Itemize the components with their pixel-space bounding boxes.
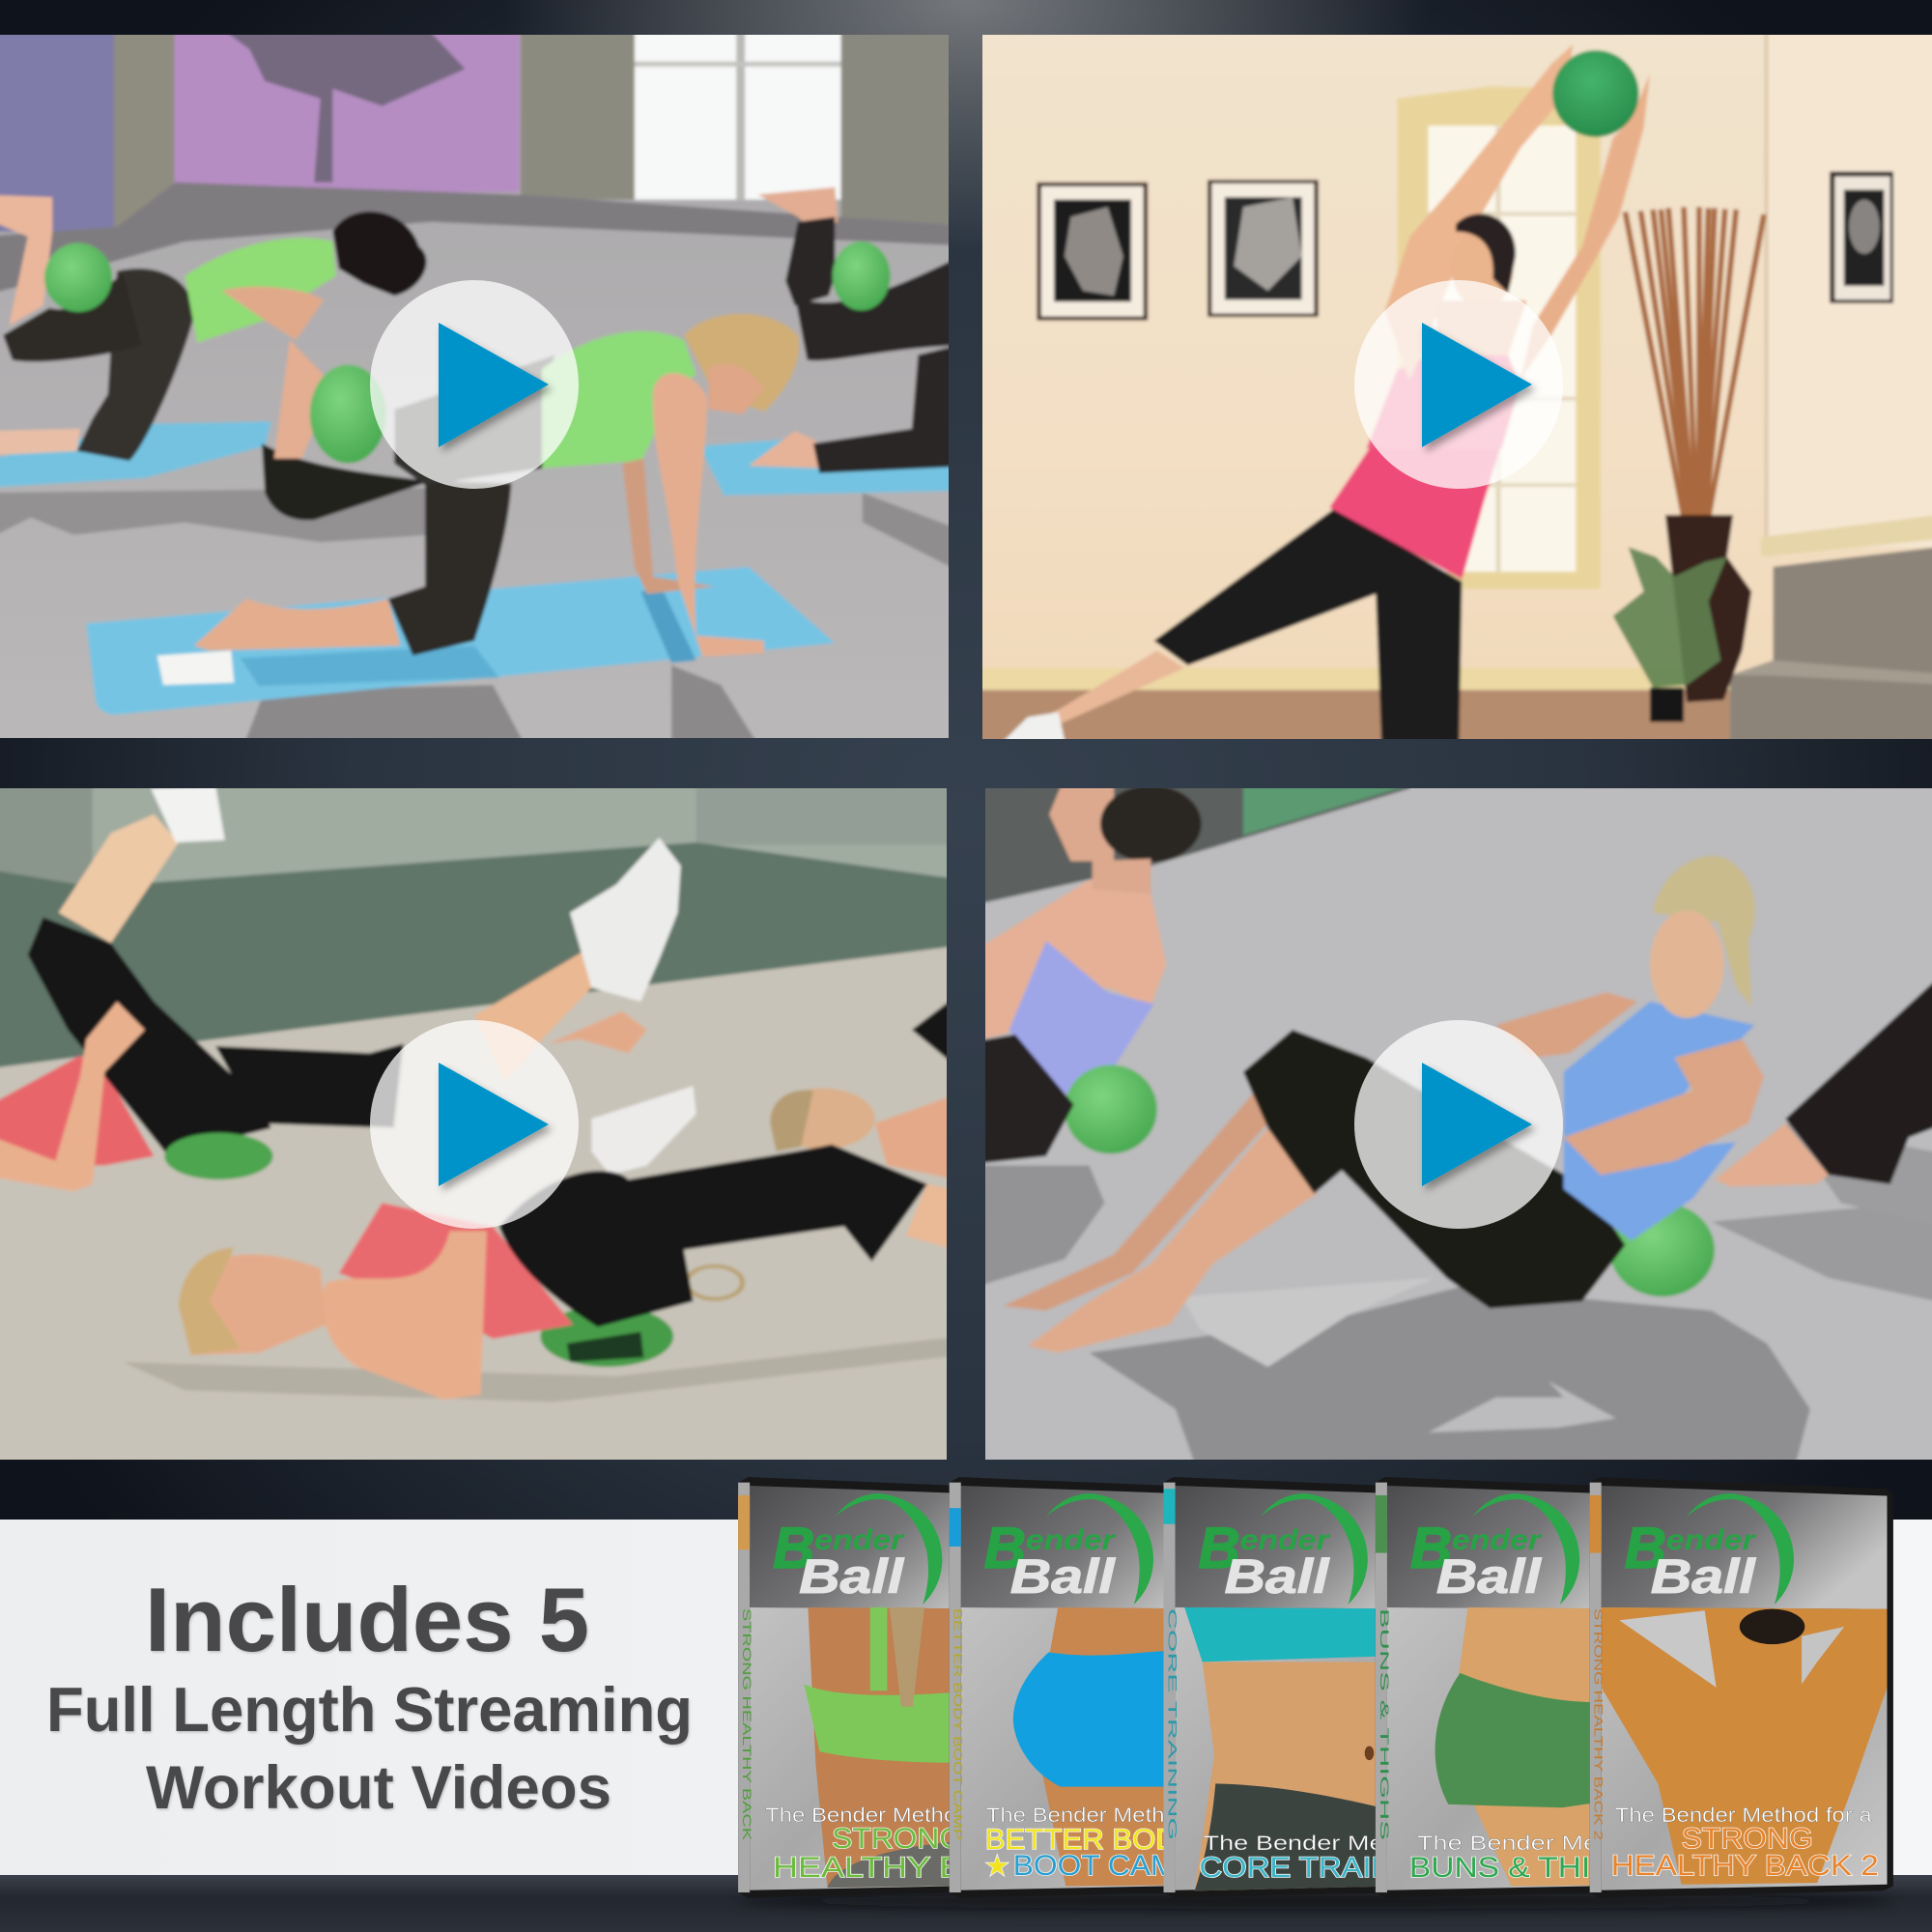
DVD case 4: Buns & Thighs: B	[1410, 1516, 1452, 1580]
DVD case 3: Core Training: B	[1198, 1516, 1240, 1580]
DVD case 1: Strong Healthy Back: ender	[814, 1524, 906, 1556]
DVD case 3: Core Training: ender	[1240, 1524, 1331, 1556]
DVD case 2: Better Body Boot Camp: BETTER BODY	[985, 1824, 1198, 1856]
DVD case 2: Better Body Boot Camp: Ball	[1010, 1549, 1116, 1604]
DVD case 5: Strong Healthy Back 2: B	[1625, 1516, 1666, 1580]
vase and plant	[1665, 515, 1751, 702]
caption heading: Includes 5	[145, 1569, 589, 1670]
play button	[1354, 280, 1563, 489]
DVD case 5: Strong Healthy Back 2: ender	[1666, 1524, 1757, 1556]
panel: video still, kneeling leg lifts	[0, 14, 980, 754]
panel: video still, seated twist	[960, 772, 1932, 1479]
DVD case 3: Core Training: CORE TRAINING	[1200, 1852, 1451, 1884]
DVD case 5: Strong Healthy Back 2: HEALTHY BACK 2	[1611, 1850, 1879, 1882]
back woman	[985, 879, 1167, 1040]
main woman	[1610, 1203, 1715, 1296]
window	[1397, 86, 1601, 589]
back right woman	[757, 187, 838, 232]
play button	[1354, 1020, 1563, 1229]
DVD case 5: Strong Healthy Back 2: STRONG	[1682, 1823, 1813, 1855]
DVD case 5: Strong Healthy Back 2	[1590, 1477, 1893, 1898]
DVD case 1: Strong Healthy Back: STRONG	[832, 1823, 963, 1855]
play button	[370, 280, 579, 489]
DVD case 1: Strong Healthy Back: B	[773, 1516, 814, 1580]
DVD case 1: Strong Healthy Back: HEALTHY BACK	[773, 1852, 1034, 1884]
panel: video still, floor bridge	[0, 772, 980, 1479]
DVD case 4: Buns & Thighs: BUNS & THIGHS	[1378, 1608, 1391, 1840]
DVD case 1: Strong Healthy Back	[738, 1477, 1041, 1898]
caption heading	[46, 1569, 693, 1822]
DVD case 2: Better Body Boot Camp: BETTER BODY BOOT CAMP	[952, 1608, 965, 1840]
DVD case 2: Better Body Boot Camp: B	[984, 1516, 1026, 1580]
DVD case 1: Strong Healthy Back: The Bender Method for a	[765, 1804, 1022, 1827]
back right woman	[800, 1087, 876, 1151]
DVD case 2: Better Body Boot Camp: The Bender Method for a	[986, 1804, 1243, 1827]
DVD case 2: Better Body Boot Camp: ★	[985, 1851, 1009, 1881]
DVD case 3: Core Training: CORE TRAINING	[1165, 1608, 1179, 1840]
DVD case 4: Buns & Thighs: ender	[1452, 1524, 1544, 1556]
caption heading: Full Length Streaming	[46, 1674, 693, 1745]
white caption band	[0, 1520, 1932, 1875]
DVD case 4: Buns & Thighs: Ball	[1436, 1549, 1542, 1604]
DVD case 3: Core Training: The Bender Method	[1204, 1833, 1435, 1855]
stairs	[1761, 513, 1932, 557]
left woman	[59, 814, 179, 943]
DVD case 5: Strong Healthy Back 2: The Bender Method for a	[1615, 1804, 1872, 1827]
picture frames	[1037, 183, 1148, 321]
dark base strip	[0, 1875, 1932, 1932]
floor shadows	[985, 1164, 1105, 1285]
DVD case 3: Core Training	[1163, 1477, 1467, 1898]
DVD case 4: Buns & Thighs: The Bender Method	[1417, 1833, 1649, 1855]
play button	[370, 1020, 579, 1229]
DVD case 1: Strong Healthy Back: STRONG HEALTHY BACK	[740, 1608, 753, 1840]
DVD case 2: Better Body Boot Camp: BOOT CAMP	[1013, 1850, 1197, 1882]
DVD case 5: Strong Healthy Back 2: Ball	[1651, 1549, 1756, 1604]
panel: video still, standing side stretch	[948, 14, 1932, 754]
reeds	[1625, 207, 1764, 518]
DVD case 1: Strong Healthy Back: Ball	[799, 1549, 904, 1604]
right woman	[1715, 1123, 1829, 1186]
caption heading: Workout Videos	[146, 1754, 611, 1822]
DVD case 2: Better Body Boot Camp: ender	[1026, 1524, 1117, 1556]
main woman	[194, 599, 401, 650]
DVD case 4: Buns & Thighs	[1376, 1477, 1679, 1898]
main woman	[687, 1266, 743, 1299]
mats	[0, 421, 271, 488]
woman	[1053, 650, 1184, 724]
DVD case 5: Strong Healthy Back 2: STRONG HEALTHY BACK 2	[1592, 1608, 1605, 1840]
shadow under DVD row	[736, 1893, 1895, 1909]
DVD case 2: Better Body Boot Camp	[950, 1477, 1253, 1898]
main raised leg and shoes	[474, 951, 591, 1081]
DVD case 3: Core Training: Ball	[1225, 1549, 1330, 1604]
DVD case 4: Buns & Thighs: BUNS & THIGHS	[1409, 1852, 1661, 1884]
back left woman	[0, 195, 52, 326]
